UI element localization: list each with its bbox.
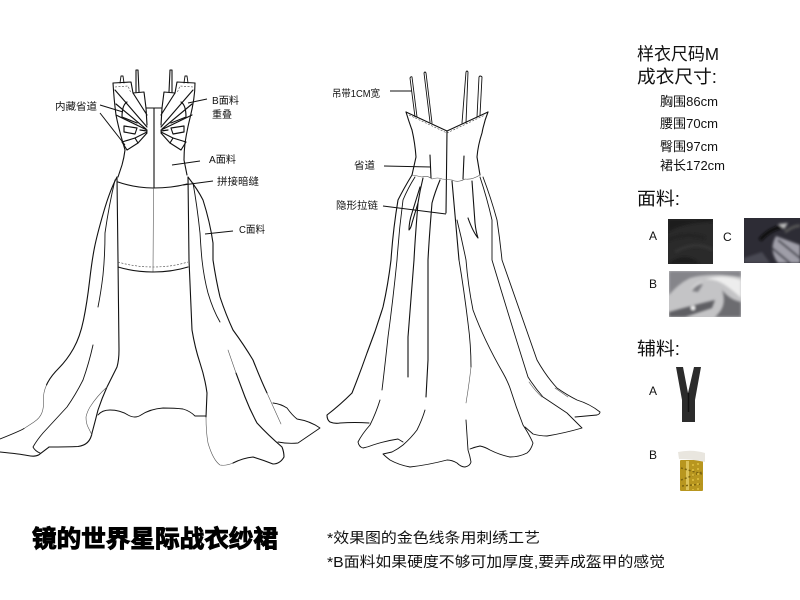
front labels — [55, 94, 265, 236]
back skirt panels — [327, 175, 600, 467]
label: hidden seam: 拼接暗缝 — [217, 175, 259, 188]
note: fabric B thickness: *B面料如果硬度不够可加厚度,要弄成盔甲的感觉 — [327, 554, 665, 571]
swatch B: silver satin — [669, 271, 741, 317]
waist measurement: 腰围70cm — [660, 116, 718, 131]
front skirt panels — [0, 177, 320, 465]
sample size heading: 样衣尺码M — [637, 44, 719, 64]
fabric letter A: A — [649, 229, 657, 243]
back callout leaders — [383, 91, 446, 214]
fabric letter B: B — [649, 277, 657, 291]
swatch C: dark organza — [744, 218, 800, 263]
label: invisible zipper: 隐形拉链 — [336, 199, 378, 212]
back bodice — [406, 71, 488, 213]
hip measurement: 臀围97cm — [660, 139, 718, 154]
trim letter A: A — [649, 384, 657, 398]
fabric letter C: C — [723, 230, 732, 244]
front callout leaders — [100, 99, 233, 234]
label: hidden dart: 内藏省道 — [55, 100, 97, 113]
label: C fabric: C面料 — [239, 223, 265, 236]
bust measurement: 胸围86cm — [660, 94, 718, 109]
label: strap width: 吊带1CM宽 — [332, 87, 380, 100]
icon: gold glitter jar — [678, 451, 705, 491]
swatch A: black satin — [668, 219, 713, 264]
label: A fabric: A面料 — [209, 153, 236, 166]
note: embroidery: *效果图的金色线条用刺绣工艺 — [327, 530, 540, 547]
trim letter B: B — [649, 448, 657, 462]
back labels — [332, 87, 380, 212]
title: 镜的世界星际战衣纱裙 — [32, 526, 278, 553]
size specification — [637, 44, 725, 173]
back view dress drawing — [327, 71, 600, 467]
trims heading: 辅料: — [637, 339, 680, 359]
front view dress drawing — [0, 70, 320, 465]
fabric heading: 面料: — [637, 189, 680, 209]
fabric section — [637, 189, 800, 317]
garment size heading: 成衣尺寸: — [637, 67, 717, 87]
icon: black zipper — [676, 367, 701, 422]
trims section — [637, 339, 705, 491]
label: B fabric: B面料 — [212, 94, 239, 107]
front bodice — [113, 70, 195, 188]
label: overlap: 重叠 — [212, 108, 232, 121]
label: dart: 省道 — [354, 159, 375, 172]
skirt length measurement: 裙长172cm — [660, 158, 725, 173]
